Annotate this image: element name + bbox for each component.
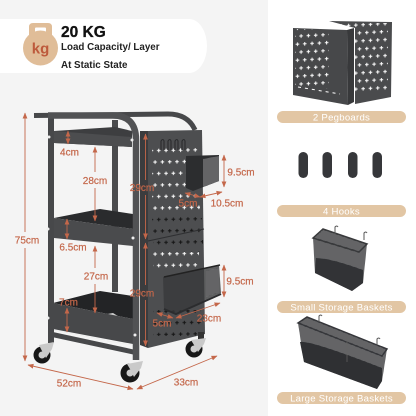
accessory: large basket <box>298 315 387 389</box>
dimension annotations <box>15 113 255 390</box>
middle shelf <box>54 209 133 246</box>
rear wheel strut <box>198 332 204 342</box>
back pegboard <box>329 21 392 104</box>
accessory: pegboards <box>293 21 392 105</box>
top handle rail <box>34 114 195 130</box>
label: upper 29cm: 29cm <box>130 183 154 194</box>
small side basket <box>186 155 219 191</box>
label: 4cm: 4cm <box>60 148 79 158</box>
arrow: upper board height <box>144 134 146 239</box>
arrow: lower board height <box>144 243 146 346</box>
label: lower 5cm: 5cm <box>153 318 171 330</box>
label: upper 5cm: 5cm <box>179 198 197 210</box>
label: 7cm: 7cm <box>59 298 78 308</box>
icon: kettlebell <box>23 23 58 66</box>
arrow: top gap <box>94 147 96 221</box>
label pill: small baskets: Small Storage Baskets <box>290 302 393 314</box>
large side basket <box>163 265 221 314</box>
caster: left <box>34 342 54 364</box>
pegboard <box>140 130 205 348</box>
arrow: width <box>28 365 133 389</box>
label: 33cm: 33cm <box>174 378 198 388</box>
arrow: small basket depth <box>185 193 200 197</box>
arrow: small basket width <box>200 192 222 197</box>
cart illustration <box>34 114 221 382</box>
label pill: 4 hooks <box>277 205 406 218</box>
label: lower 29cm: 29cm <box>130 288 154 300</box>
arrow: large basket depth <box>157 313 173 318</box>
label: 27cm: 27cm <box>84 272 108 282</box>
label: 28cm: 28cm <box>83 176 107 187</box>
front pegboard <box>293 28 354 105</box>
label pill: 2 pegboards <box>277 111 406 124</box>
label pill: small baskets <box>277 301 406 314</box>
label pill: large baskets: Large Storage Baskets <box>290 394 393 404</box>
arrow: top depth <box>67 131 69 144</box>
label pill: 4 hooks: 4 Hooks <box>323 206 360 218</box>
capacity description: Load Capacity/ Layer <box>61 42 160 53</box>
capacity description: At Static State <box>61 60 128 71</box>
right panel <box>268 0 416 416</box>
caster: rear <box>186 338 206 358</box>
hooks <box>161 140 185 150</box>
banner panel <box>0 19 207 73</box>
label: upper 9.5cm: 9.5cm <box>227 168 255 178</box>
capacity heading: 20 KG <box>61 24 106 41</box>
label: 6.5cm: 6.5cm <box>59 242 87 254</box>
arrow: depth <box>137 356 217 389</box>
label pill: 2 pegboards: 2 Pegboards <box>313 112 370 124</box>
arrow: large basket width <box>176 303 220 318</box>
arrow: total height <box>24 113 26 361</box>
arrow: lower gap <box>94 246 96 313</box>
icon: kettlebell: kg <box>32 40 49 58</box>
top shelf <box>54 127 132 147</box>
casters <box>34 338 206 382</box>
label: 23cm: 23cm <box>197 314 221 324</box>
load capacity banner <box>0 19 207 73</box>
label: 52cm: 52cm <box>57 378 81 390</box>
label: lower 9.5cm: 9.5cm <box>226 276 254 288</box>
label: 10.5cm: 10.5cm <box>211 198 243 210</box>
arrow: large basket height <box>223 265 225 297</box>
arrow: middle depth <box>66 219 68 239</box>
arrow: small basket height <box>223 155 225 187</box>
capacity description <box>61 42 160 71</box>
caster: front <box>120 361 143 382</box>
label: 75cm: 75cm <box>15 236 39 246</box>
accessory: hooks <box>298 152 382 178</box>
front left leg <box>48 114 54 343</box>
arrow: bottom depth <box>66 308 68 332</box>
back legs <box>112 120 118 292</box>
bottom shelf <box>50 291 138 353</box>
accessory: small basket <box>313 226 367 291</box>
front arch and right leg <box>48 115 136 360</box>
